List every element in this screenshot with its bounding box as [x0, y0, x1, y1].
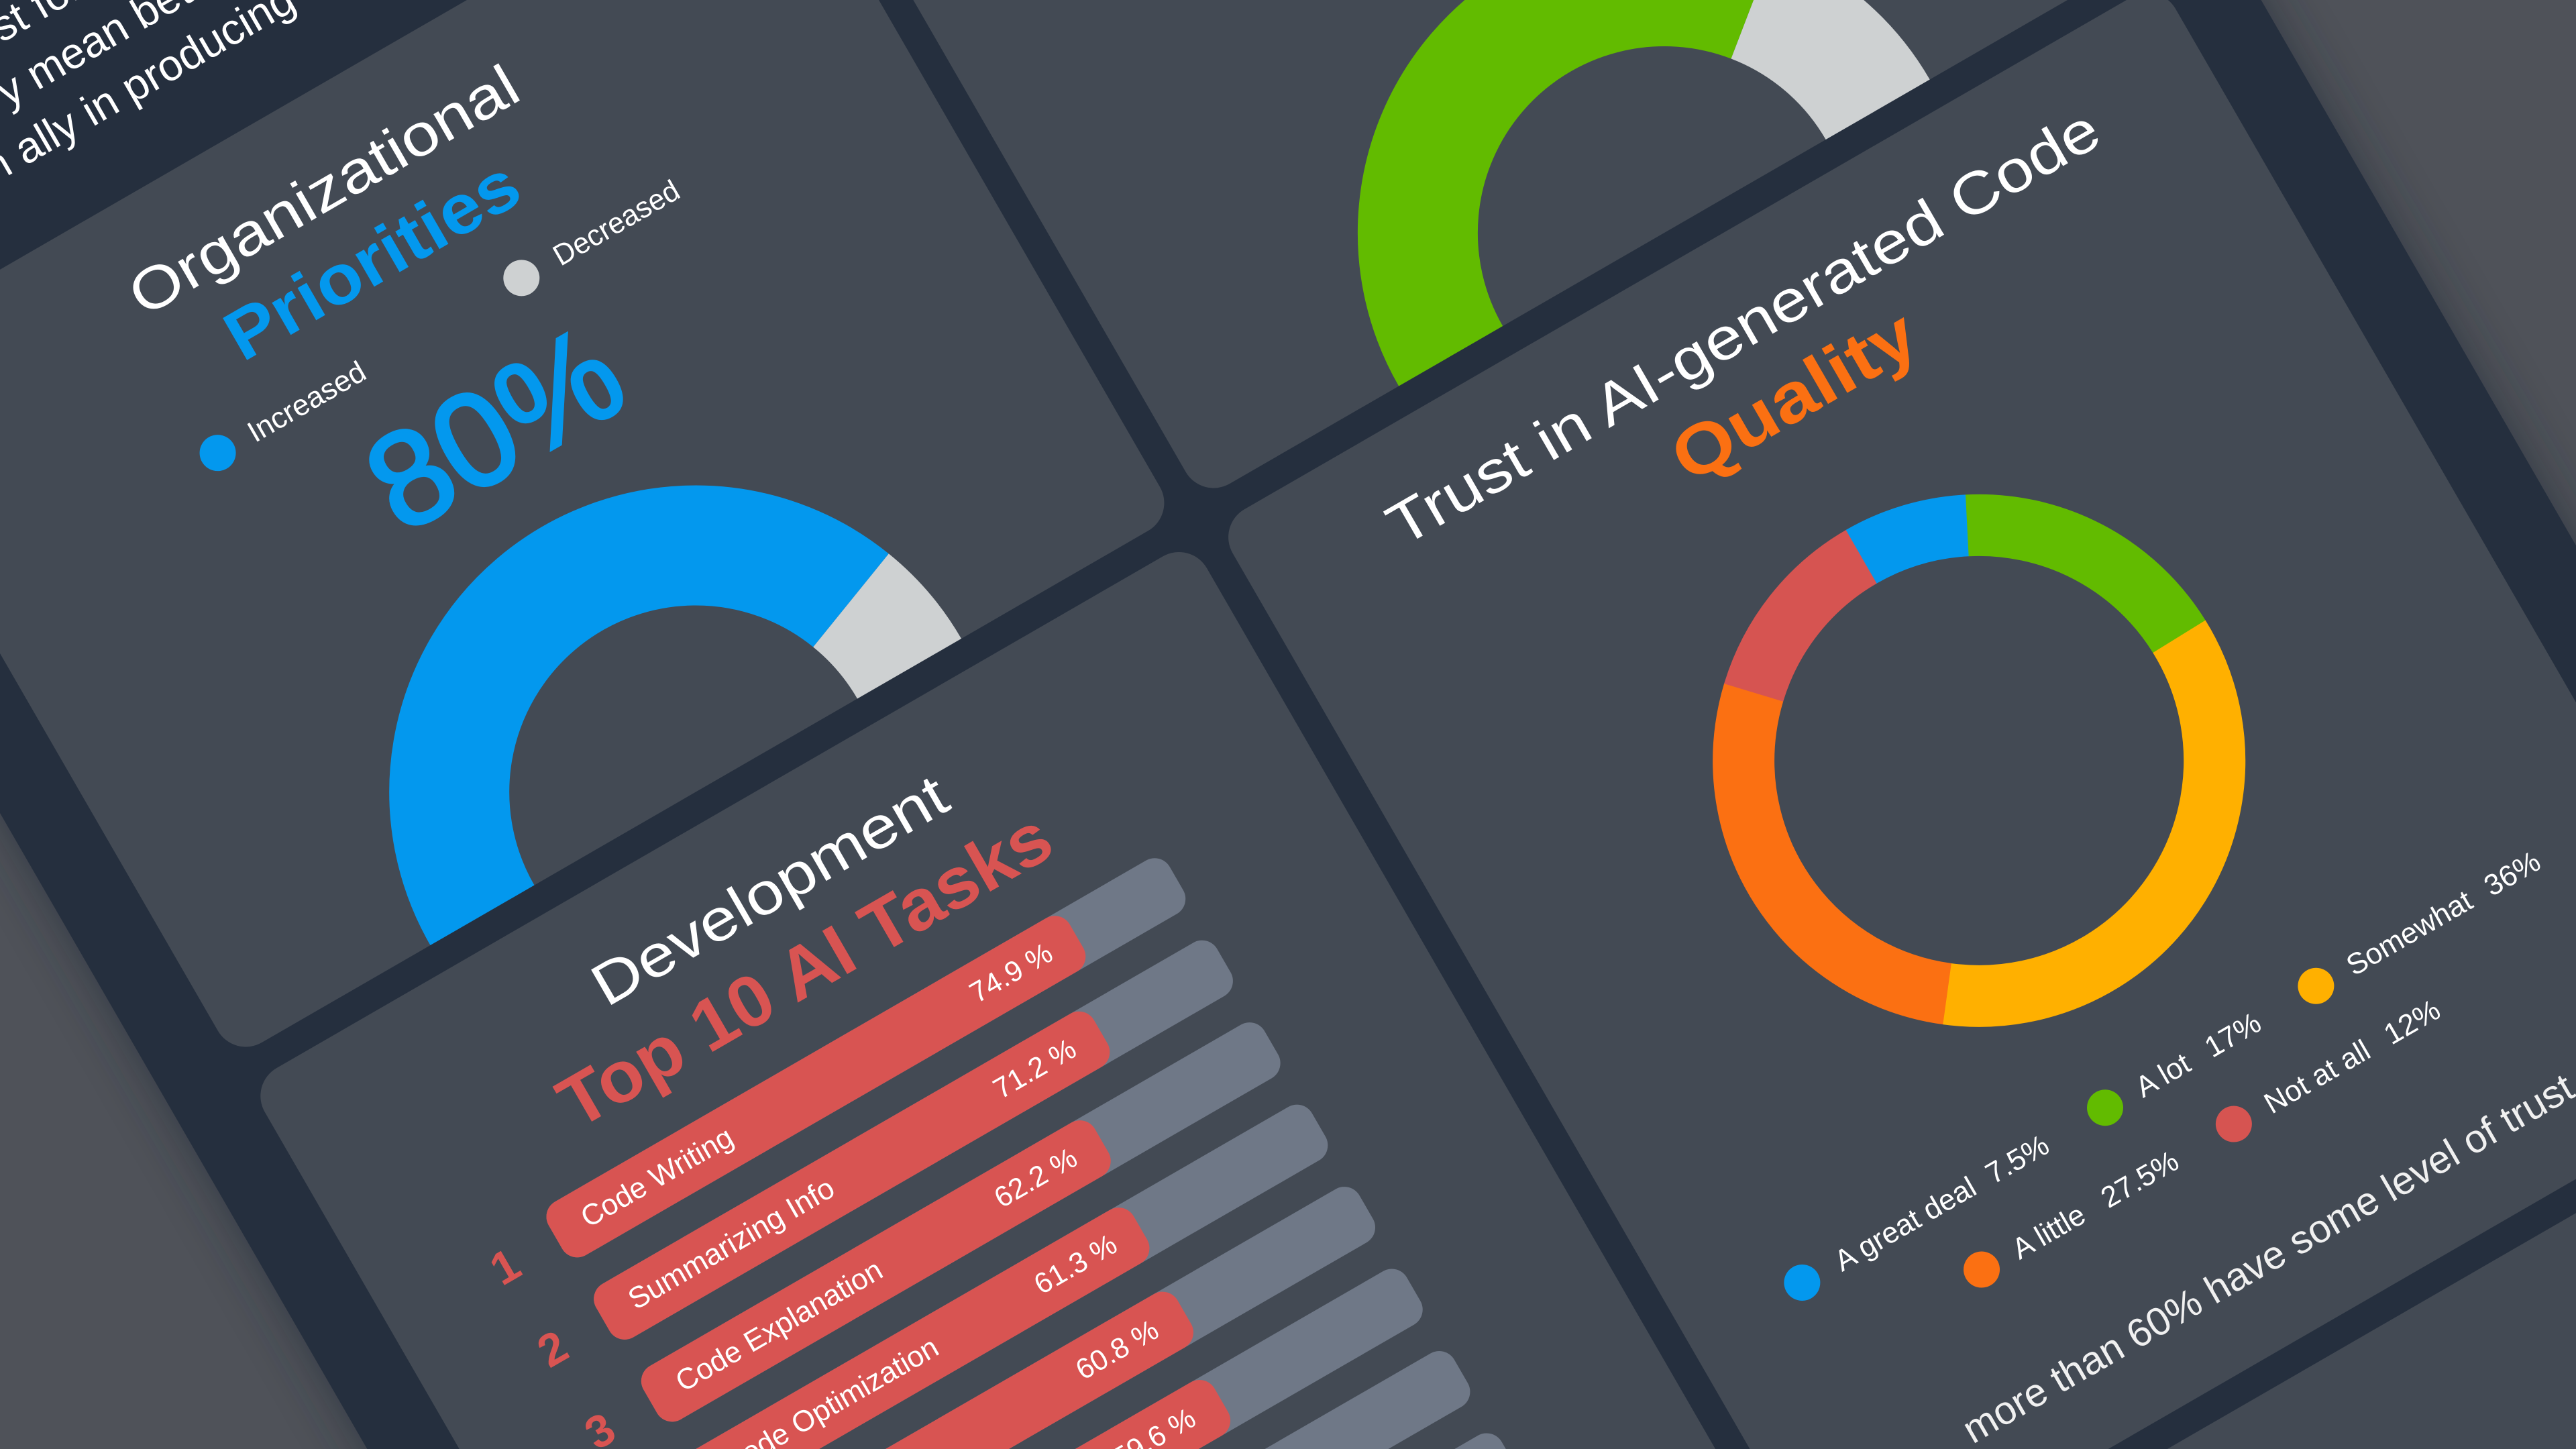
legend: a little — [1957, 1142, 2185, 1294]
legend: a great deal: 7.5% — [1980, 1128, 2055, 1191]
summary text: more than 60% have some level of trust — [1955, 1065, 2576, 1449]
bar row 7 — [824, 1344, 1477, 1449]
bar row 1: 74.9 % — [964, 936, 1058, 1010]
heading: organizational: Organizational — [117, 52, 530, 329]
bar row 4: 61.3 % — [1028, 1228, 1122, 1301]
legend: decreased — [496, 172, 686, 303]
legend: a great deal — [1778, 1126, 2055, 1307]
legend: a great deal: A great deal — [1829, 1171, 1982, 1278]
legend: not at all — [2209, 991, 2447, 1148]
panel: trust in AI-generated code quality — [1217, 0, 2576, 1449]
gauge chart: 80 percent — [359, 455, 910, 915]
bar row 2: Summarizing Info — [623, 1171, 840, 1316]
heading: trust in AI-generated code: Trust in AI-generated Code — [1375, 95, 2111, 559]
heading: priorities: Priorities — [211, 145, 533, 376]
bar row 4 — [621, 1098, 1334, 1449]
donut chart: trust levels — [1524, 306, 2434, 1216]
legend: somewhat: Somewhat — [2341, 884, 2478, 982]
bar row 6 — [716, 1263, 1429, 1449]
stat: 80%: 80% — [341, 297, 648, 560]
panel: green gauge card — [802, 0, 2145, 500]
legend: somewhat — [2292, 843, 2546, 1011]
heading: development: Development — [580, 761, 959, 1019]
heading: quality: Quality — [1658, 294, 1931, 498]
bar row 1: Code Writing — [575, 1120, 739, 1234]
legend: a lot — [2080, 1004, 2267, 1132]
bar row 5 — [668, 1181, 1382, 1449]
bar row 8 — [872, 1427, 1524, 1449]
legend: a lot: 17% — [2199, 1006, 2267, 1064]
bar row 1 — [478, 852, 1192, 1299]
legend: increased: Increased — [242, 355, 372, 449]
legend: somewhat: 36% — [2479, 845, 2546, 903]
legend: not at all: Not at all — [2259, 1034, 2376, 1120]
bar row 2 — [526, 934, 1239, 1381]
legend: a little: A little — [2006, 1198, 2091, 1266]
legend: a little: 27.5% — [2096, 1144, 2184, 1215]
bar row 1: 1 — [482, 1238, 529, 1295]
legend: decreased: Decreased — [547, 174, 686, 272]
panel: card below trust — [1854, 1085, 2576, 1449]
panel: development top 10 AI tasks — [249, 540, 1814, 1449]
bar row 3: 62.2 % — [989, 1142, 1083, 1214]
gauge chart: green — [1328, 0, 1878, 356]
bar row 3: Code Explanation — [670, 1253, 888, 1398]
bar row 2: 71.2 % — [988, 1032, 1082, 1106]
bar row 3 — [574, 1016, 1287, 1449]
legend: not at all: 12% — [2378, 994, 2446, 1051]
legend: increased — [193, 354, 372, 478]
heading: top 10 AI tasks: Top 10 AI Tasks — [544, 796, 1065, 1144]
bar row 5: 60.8 % — [1070, 1313, 1164, 1387]
panel: organizational priorities — [0, 0, 1176, 1059]
bar row 2: 2 — [529, 1321, 576, 1377]
legend: a lot: A lot — [2130, 1046, 2196, 1104]
